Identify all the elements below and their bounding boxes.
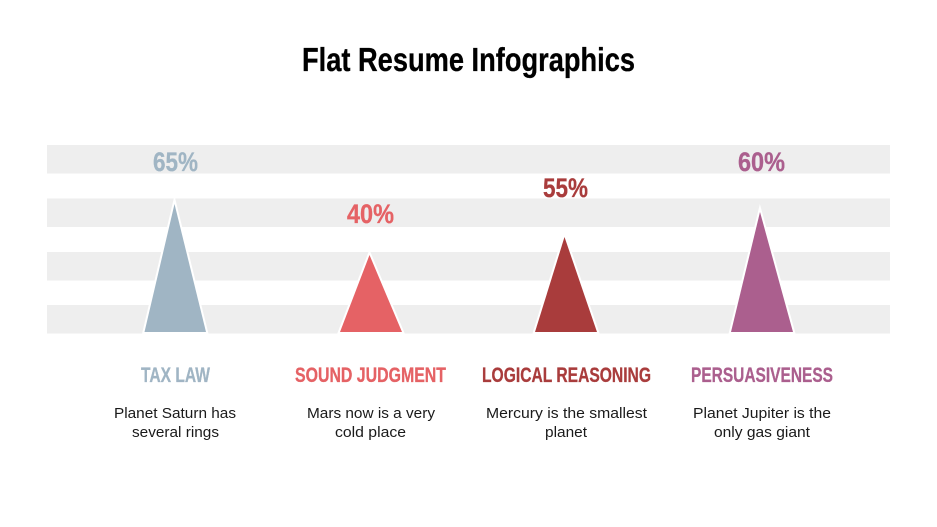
description: tax law: several rings [132, 425, 219, 441]
description: persuasiveness: Planet Jupiter is the [693, 406, 831, 422]
column: sound judgment [295, 199, 446, 441]
heading: tax law: TAX LAW [141, 364, 210, 387]
triangle: 40% [340, 255, 402, 332]
column: tax law [114, 147, 236, 441]
description: sound judgment: cold place [335, 425, 406, 441]
description: logical reasoning: planet [545, 425, 587, 441]
description: tax law: Planet Saturn has [114, 406, 236, 422]
value: 65%: 65% [153, 147, 198, 177]
heading: sound judgment: SOUND JUDGMENT [295, 364, 446, 387]
value: 55%: 55% [543, 173, 588, 203]
triangle: 55% [535, 237, 597, 332]
column: logical reasoning [482, 173, 651, 441]
triangle: 60% [731, 212, 793, 332]
background stripes [47, 145, 890, 334]
value: 60%: 60% [738, 147, 785, 177]
title: Flat Resume Infographics [302, 41, 635, 78]
description: logical reasoning: Mercury is the smallest [486, 406, 647, 422]
description: sound judgment: Mars now is a very [307, 406, 436, 422]
value: 40%: 40% [347, 199, 394, 229]
column: persuasiveness [691, 147, 833, 441]
heading: persuasiveness: PERSUASIVENESS [691, 364, 833, 387]
triangle: 65% [144, 204, 206, 332]
heading: logical reasoning: LOGICAL REASONING [482, 364, 651, 387]
description: persuasiveness: only gas giant [714, 425, 810, 441]
